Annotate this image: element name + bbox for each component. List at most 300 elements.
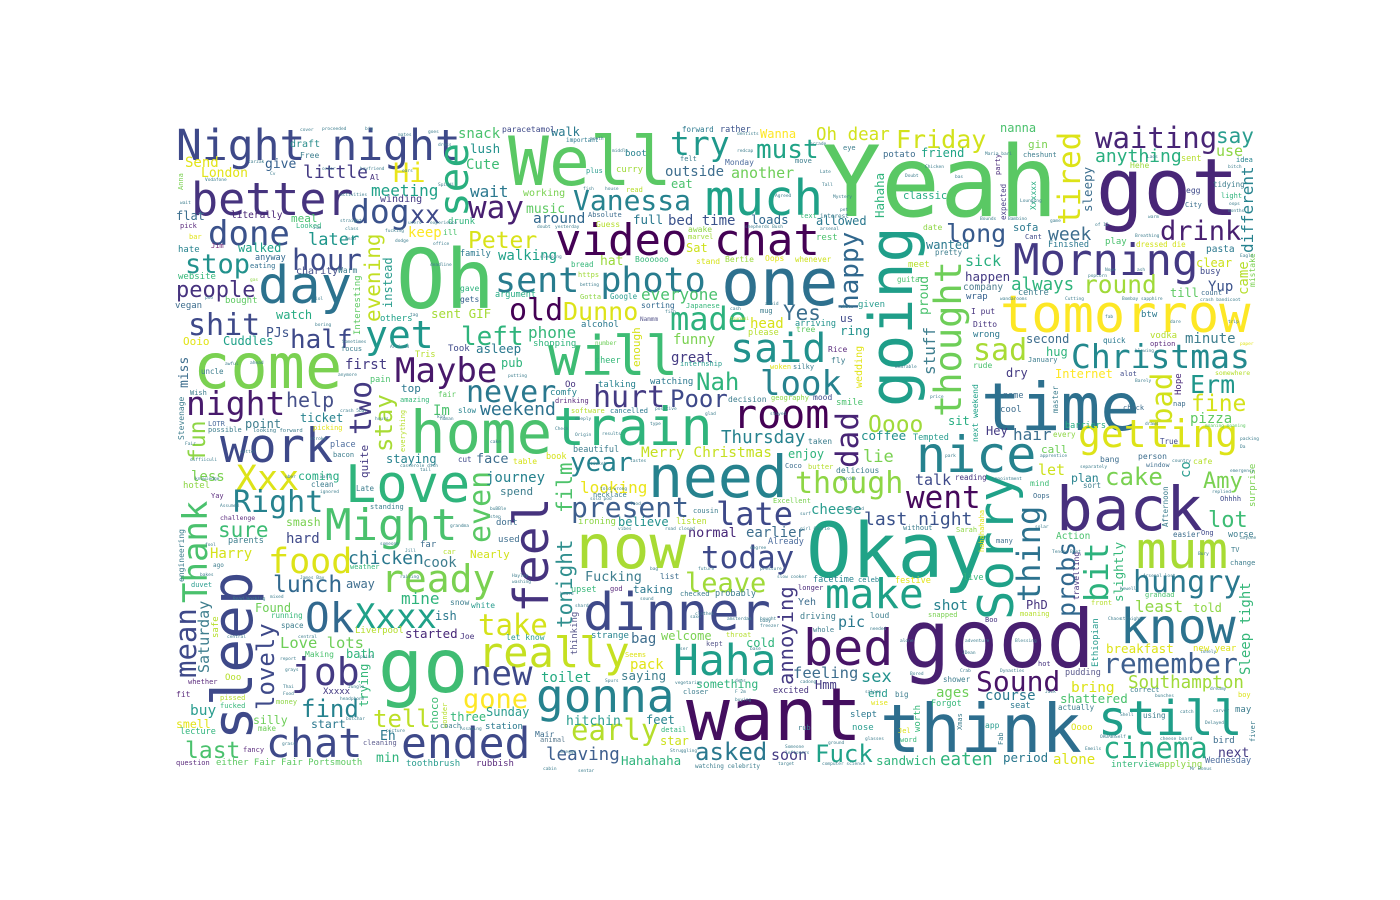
small words: hat bbox=[600, 254, 623, 269]
small words: cafe bbox=[1193, 457, 1212, 466]
small words: wise bbox=[871, 699, 888, 707]
tiny background words: yesterday bbox=[555, 224, 580, 230]
small words: worse bbox=[1228, 530, 1254, 540]
small words: nanna bbox=[1000, 121, 1036, 135]
large words: room bbox=[733, 392, 829, 438]
tiny background words: of 12 bbox=[1095, 222, 1109, 228]
small words: Gotta bbox=[580, 293, 601, 301]
small words: throat bbox=[726, 631, 751, 639]
tiny background words: butchar bbox=[346, 716, 365, 722]
small words: weather bbox=[350, 563, 380, 571]
tiny background words: arcade bbox=[810, 141, 827, 147]
large words bbox=[169, 0, 1251, 769]
small words: sort bbox=[1083, 481, 1101, 490]
medium words: evening bbox=[361, 233, 385, 322]
medium words: course bbox=[985, 688, 1036, 704]
tiny background words: crash bandicoot bbox=[1200, 297, 1241, 303]
medium words: normal bbox=[688, 525, 737, 541]
small words: pub bbox=[501, 356, 523, 370]
small words: Hmm bbox=[815, 678, 837, 692]
tiny background words: Da bbox=[1240, 444, 1246, 450]
tiny background words: dens bbox=[735, 678, 746, 684]
medium words: must bbox=[756, 135, 819, 165]
small words: welcome bbox=[661, 629, 712, 643]
small words: fancy bbox=[243, 746, 264, 754]
tiny background words: shard bbox=[575, 603, 589, 609]
small words: worth bbox=[913, 705, 923, 732]
small words: travelling bbox=[1072, 552, 1081, 600]
large words: got bbox=[1096, 142, 1239, 234]
tiny background words: game bbox=[1050, 219, 1061, 224]
small words: facetime bbox=[813, 575, 854, 585]
small words: end bbox=[868, 687, 888, 700]
small words: staying bbox=[386, 452, 437, 466]
small words: nose bbox=[852, 723, 874, 733]
tiny background words: garden bbox=[840, 476, 857, 482]
large words: try bbox=[670, 124, 730, 163]
small words: fair bbox=[438, 390, 457, 399]
tiny background words: lonely bbox=[1200, 649, 1217, 655]
small words: plus bbox=[586, 167, 603, 175]
small words: ticket bbox=[300, 411, 343, 425]
large words: know bbox=[1120, 599, 1236, 655]
medium words: meeting bbox=[371, 181, 438, 200]
medium words: walking bbox=[498, 248, 557, 264]
small words: new year bbox=[1193, 644, 1237, 654]
tiny background words: boyfriend bbox=[360, 166, 385, 172]
tiny background words: class bbox=[345, 226, 359, 232]
small words: without bbox=[903, 524, 933, 532]
small words: Afternoon bbox=[1161, 486, 1170, 527]
small words: important bbox=[566, 137, 599, 144]
medium words: Saturday bbox=[195, 601, 213, 673]
tiny background words: human bbox=[440, 416, 454, 422]
small words: duvet bbox=[191, 581, 212, 589]
small words: LOTR bbox=[208, 420, 226, 428]
small words: pasta bbox=[1206, 244, 1235, 255]
small words: gin bbox=[1028, 138, 1048, 151]
large words: two bbox=[344, 381, 379, 435]
small words: literally bbox=[231, 210, 283, 221]
tiny background words: sold pod bbox=[590, 496, 612, 502]
small words: smile bbox=[836, 398, 863, 408]
large words: dad bbox=[830, 412, 866, 468]
tiny background words: fish bbox=[583, 186, 594, 192]
large words: thought bbox=[927, 261, 970, 417]
tiny background words: cake bbox=[490, 439, 501, 445]
large words: old bbox=[509, 293, 563, 328]
tiny background words: sleeping bbox=[540, 254, 562, 260]
large words: cinema bbox=[1103, 731, 1208, 765]
tiny background words: ears bbox=[402, 169, 413, 174]
large words: done bbox=[208, 214, 290, 254]
small words: sit bbox=[948, 414, 970, 428]
small words: god bbox=[610, 585, 623, 593]
tiny background words: arsenal bbox=[820, 226, 839, 232]
small words: Wednesday bbox=[1205, 756, 1251, 766]
tiny background words: draws bbox=[1145, 421, 1159, 427]
tiny background words: Tall bbox=[822, 182, 833, 188]
small words: Yay bbox=[211, 492, 224, 500]
tiny background words: mates bbox=[398, 132, 412, 138]
medium words: probs bbox=[1052, 542, 1081, 617]
small words: bang bbox=[1100, 455, 1119, 464]
medium words: shot bbox=[933, 598, 968, 614]
medium words: fine bbox=[1191, 391, 1246, 417]
medium words: say bbox=[1216, 124, 1254, 148]
medium words: funny bbox=[673, 332, 715, 348]
medium words: face bbox=[476, 451, 509, 467]
tiny background words: stroke bbox=[310, 436, 327, 442]
small words: full bbox=[633, 212, 663, 227]
small words: ish bbox=[435, 609, 457, 623]
small words: busy bbox=[1200, 267, 1220, 277]
tiny background words: proceeded bbox=[322, 126, 347, 132]
small words: bread bbox=[571, 260, 594, 269]
small words: curry bbox=[616, 165, 644, 175]
tiny background words: Someone bbox=[785, 744, 804, 750]
small words: may bbox=[1235, 705, 1252, 715]
tiny background words: vegetarian bbox=[675, 680, 702, 686]
small words: probably bbox=[715, 589, 756, 599]
large words: present bbox=[571, 491, 689, 524]
tiny background words: dreamy bbox=[1210, 686, 1227, 692]
tiny background words: grandma bbox=[450, 523, 469, 529]
small words: watch bbox=[276, 308, 312, 322]
tiny background words: stayed bbox=[770, 411, 787, 417]
medium words: Peter bbox=[468, 228, 537, 254]
medium words: ages bbox=[936, 685, 970, 701]
large words: dog bbox=[350, 192, 410, 231]
small words: fiver bbox=[1249, 721, 1257, 742]
small words: dry bbox=[1006, 366, 1028, 380]
medium words: lie bbox=[863, 447, 894, 467]
tiny background words: Cv bbox=[270, 171, 276, 177]
tiny background words: Greggs bbox=[560, 749, 577, 755]
tiny background words: Thai bbox=[283, 684, 294, 690]
small words: easier bbox=[1173, 530, 1201, 539]
medium words: use bbox=[1216, 142, 1243, 160]
medium words: cake bbox=[1105, 463, 1163, 491]
small words: classic bbox=[903, 190, 947, 202]
medium words: feeling bbox=[793, 664, 858, 682]
tiny background words: paint bbox=[360, 654, 374, 660]
tiny background words: experience bbox=[430, 220, 457, 226]
medium words: Im bbox=[433, 403, 450, 419]
small words: hotel bbox=[183, 481, 210, 491]
small words: top bbox=[401, 382, 421, 395]
tiny background words: wearable bbox=[895, 364, 917, 370]
small words: loads bbox=[751, 212, 789, 227]
tiny background words: Fair bbox=[185, 441, 196, 447]
tiny background words: mixed bbox=[270, 594, 284, 600]
large words: now bbox=[576, 512, 686, 583]
small words: Found bbox=[255, 601, 291, 615]
medium words: outside bbox=[665, 164, 724, 180]
small words: picking bbox=[313, 424, 343, 432]
medium words: happy bbox=[835, 232, 865, 310]
tiny background words: slow cooker bbox=[777, 574, 807, 580]
small words: walked bbox=[238, 241, 281, 255]
small words: wonder bbox=[441, 703, 449, 728]
medium words: tonight bbox=[553, 539, 577, 628]
small words: Liverpool bbox=[355, 626, 404, 636]
small words: software bbox=[571, 407, 605, 415]
large words: time bbox=[981, 369, 1140, 446]
tiny background words: redcap bbox=[737, 148, 754, 154]
small words: text bbox=[800, 212, 817, 220]
small words: enjoy bbox=[788, 447, 824, 461]
small words: date bbox=[923, 223, 942, 232]
small words: detail bbox=[661, 726, 686, 734]
large words: job bbox=[291, 650, 360, 694]
large words: gone bbox=[463, 684, 528, 715]
small words: mood bbox=[813, 393, 832, 402]
small words: alcohol bbox=[581, 320, 619, 330]
tiny background words: avoid bbox=[765, 301, 779, 307]
tiny background words: house bbox=[605, 186, 619, 192]
tiny background words: food bbox=[630, 501, 641, 507]
small words: believe bbox=[618, 515, 669, 529]
small words: paracetamol bbox=[502, 125, 555, 134]
small words: read bbox=[626, 186, 643, 194]
tiny background words: Spurs bbox=[605, 678, 619, 684]
small words: stand bbox=[696, 257, 720, 266]
large words: hurt bbox=[593, 380, 665, 415]
small words: give bbox=[265, 157, 296, 172]
tiny background words: touched bbox=[845, 506, 864, 512]
tiny background words: cover bbox=[300, 128, 314, 133]
small words: using bbox=[1143, 711, 1166, 720]
small words: Tempted bbox=[913, 433, 949, 443]
small words: till bbox=[1170, 286, 1199, 300]
tiny background words: Tencer bbox=[1052, 549, 1069, 555]
medium words: Sleep tight bbox=[1238, 582, 1254, 675]
small words: slow bbox=[458, 406, 477, 415]
medium words: Merry Christmas bbox=[641, 445, 772, 461]
medium words: lovely bbox=[252, 623, 280, 710]
small words: nap bbox=[1173, 400, 1186, 408]
tiny background words: packing bbox=[1240, 436, 1259, 442]
medium words: annoying bbox=[774, 586, 798, 685]
tiny background words: Jack bbox=[1045, 689, 1056, 695]
tiny background words: Spindi bbox=[438, 182, 455, 188]
large words: good bbox=[902, 593, 1095, 686]
medium words: head bbox=[750, 316, 784, 332]
tiny background words: Agreed bbox=[775, 193, 792, 199]
tiny background words: straight bbox=[340, 218, 362, 224]
small words: Ooio bbox=[183, 335, 210, 348]
tiny background words: fool bbox=[205, 542, 216, 548]
tiny background words: Breathing bbox=[1135, 233, 1160, 239]
tiny background words: headphone bbox=[340, 696, 365, 702]
tiny background words: putting bbox=[508, 373, 527, 379]
tiny background words: Nope bbox=[1105, 267, 1116, 273]
small words: bath bbox=[346, 647, 375, 661]
medium words: fun bbox=[185, 420, 211, 462]
small words: away bbox=[346, 577, 375, 591]
tiny background words: wait bbox=[180, 200, 191, 206]
small words: Cuddles bbox=[223, 334, 274, 348]
tiny background words: buBBle bbox=[490, 506, 507, 512]
tiny background words: grass bbox=[282, 742, 296, 747]
medium words: minute bbox=[1185, 331, 1236, 347]
small words: whether bbox=[188, 678, 218, 686]
tiny background words: anymore bbox=[338, 373, 357, 378]
tiny background words: setter bbox=[240, 449, 257, 455]
small words: spend bbox=[500, 485, 533, 498]
small words: snow bbox=[450, 598, 469, 607]
small words: light bbox=[1221, 192, 1242, 200]
tiny background words: straight bbox=[1120, 616, 1142, 622]
large words: Morning bbox=[1013, 235, 1198, 286]
small words: interview bbox=[1111, 760, 1160, 770]
medium words: stuff bbox=[920, 327, 939, 375]
small words: wanted bbox=[926, 238, 969, 252]
small words: butter bbox=[808, 463, 833, 471]
tiny background words: awful bbox=[225, 361, 239, 367]
small words: tidying bbox=[1213, 180, 1245, 189]
small words: decision bbox=[728, 395, 767, 404]
large words: though bbox=[795, 466, 903, 501]
small words: website bbox=[178, 272, 216, 282]
small words: move bbox=[795, 157, 812, 165]
tiny background words: Struggling bbox=[670, 748, 697, 754]
large words: night bbox=[186, 384, 285, 423]
large words: never bbox=[466, 375, 556, 410]
medium words: great bbox=[671, 350, 713, 366]
medium words: Cute bbox=[466, 157, 500, 173]
medium words: talk bbox=[915, 471, 951, 489]
tiny background words: amsterdam bbox=[727, 616, 752, 622]
large words: Christmas bbox=[1071, 337, 1250, 376]
tiny background words: Bury bbox=[1198, 551, 1209, 557]
small words: Late bbox=[356, 484, 375, 493]
small words: coach bbox=[440, 722, 461, 730]
small words: walk bbox=[551, 125, 581, 139]
small words: looking forward bbox=[253, 428, 303, 434]
small words: Oops bbox=[1033, 492, 1050, 500]
large words: new bbox=[471, 654, 533, 694]
tiny background words: apprentice bbox=[1040, 453, 1067, 459]
small words: Eh bbox=[380, 729, 396, 744]
small words: Internet bbox=[1055, 367, 1113, 381]
small words: mistake bbox=[1248, 253, 1257, 287]
large words: Thank bbox=[176, 501, 216, 603]
small words: white bbox=[471, 601, 495, 610]
tiny background words: blowing bbox=[1135, 348, 1154, 354]
small words: Nearly bbox=[470, 548, 510, 561]
small words: family bbox=[460, 249, 491, 259]
small words: woken bbox=[770, 363, 791, 371]
small words: surprise bbox=[1248, 464, 1258, 507]
small words: told bbox=[1193, 601, 1222, 615]
small words: saying bbox=[621, 668, 666, 683]
medium words: leaving bbox=[546, 745, 620, 765]
small words: egg bbox=[1186, 186, 1201, 195]
medium words: bag bbox=[631, 631, 656, 647]
small words: name bbox=[1003, 391, 1023, 401]
small words: something bbox=[696, 677, 758, 691]
small words: came bbox=[1236, 261, 1252, 295]
tiny background words: fab bbox=[1105, 314, 1113, 320]
small words bbox=[175, 121, 1258, 770]
tiny background words: degree bbox=[750, 545, 767, 551]
small words: draft bbox=[290, 139, 320, 150]
medium words: soon bbox=[771, 746, 807, 764]
medium words: lunch bbox=[273, 572, 342, 598]
large words: sleep bbox=[201, 571, 266, 740]
medium words: looking bbox=[580, 478, 647, 497]
tiny background words: ticket bbox=[590, 461, 607, 467]
tiny background words: replied bbox=[1212, 489, 1231, 495]
small words: person bbox=[1138, 452, 1167, 461]
small words: pick bbox=[180, 222, 198, 230]
large words: tired bbox=[1052, 132, 1088, 225]
small words: front bbox=[1091, 599, 1112, 607]
medium words: chicken bbox=[348, 548, 424, 569]
large words: Might bbox=[325, 500, 457, 551]
tiny background words: dodge bbox=[395, 238, 409, 244]
small words: book bbox=[546, 452, 566, 462]
small words: shopping bbox=[533, 339, 576, 349]
medium words: first bbox=[345, 357, 387, 373]
medium words: people bbox=[176, 278, 255, 303]
small words: longer bbox=[798, 584, 823, 592]
small words: Japanese bbox=[686, 302, 720, 310]
large words: hungry bbox=[1133, 565, 1241, 600]
tiny background words: fucking bbox=[385, 228, 404, 234]
small words: ago bbox=[213, 562, 224, 569]
medium words: Fucking bbox=[585, 569, 642, 585]
tiny background words: Kewell bbox=[1120, 586, 1137, 592]
medium words: hair bbox=[1013, 425, 1052, 444]
tiny background words: tarzak bbox=[248, 159, 265, 165]
small words: arriving bbox=[795, 319, 836, 329]
small words: eat bbox=[671, 177, 693, 191]
large words: bed bbox=[803, 619, 893, 677]
small words: hug bbox=[1046, 345, 1068, 359]
medium words: Erm bbox=[1190, 370, 1235, 399]
tiny background words: report bbox=[280, 656, 297, 662]
small words: sorting bbox=[641, 301, 675, 310]
tiny background words: needed bbox=[870, 626, 887, 632]
small words: given bbox=[858, 300, 885, 310]
medium words: earlier bbox=[746, 525, 805, 541]
small words: Finished bbox=[1048, 240, 1089, 250]
tiny background words: ground bbox=[828, 740, 845, 746]
large words: sent photo bbox=[495, 261, 706, 301]
medium words: xx bbox=[410, 200, 440, 229]
small words: table bbox=[513, 457, 537, 466]
tiny background words: activities bbox=[340, 192, 367, 198]
large words: went bbox=[906, 480, 981, 516]
large words: today bbox=[701, 540, 794, 576]
tiny background words: Vodafone bbox=[205, 177, 227, 183]
small words: Seems bbox=[625, 651, 646, 659]
tiny background words: baby bbox=[760, 618, 771, 624]
tiny background words: bas bbox=[955, 174, 963, 180]
tiny background words: park bbox=[945, 453, 956, 459]
small words: big bbox=[895, 690, 909, 699]
small words: hahahahaha bbox=[978, 510, 986, 552]
small words: hitchin bbox=[566, 714, 621, 729]
large words: made bbox=[670, 300, 747, 338]
tiny background words: oops bbox=[1229, 202, 1240, 207]
small words: hate bbox=[178, 245, 200, 255]
small words: TV bbox=[1231, 546, 1240, 554]
small words: boy bbox=[1238, 691, 1251, 699]
